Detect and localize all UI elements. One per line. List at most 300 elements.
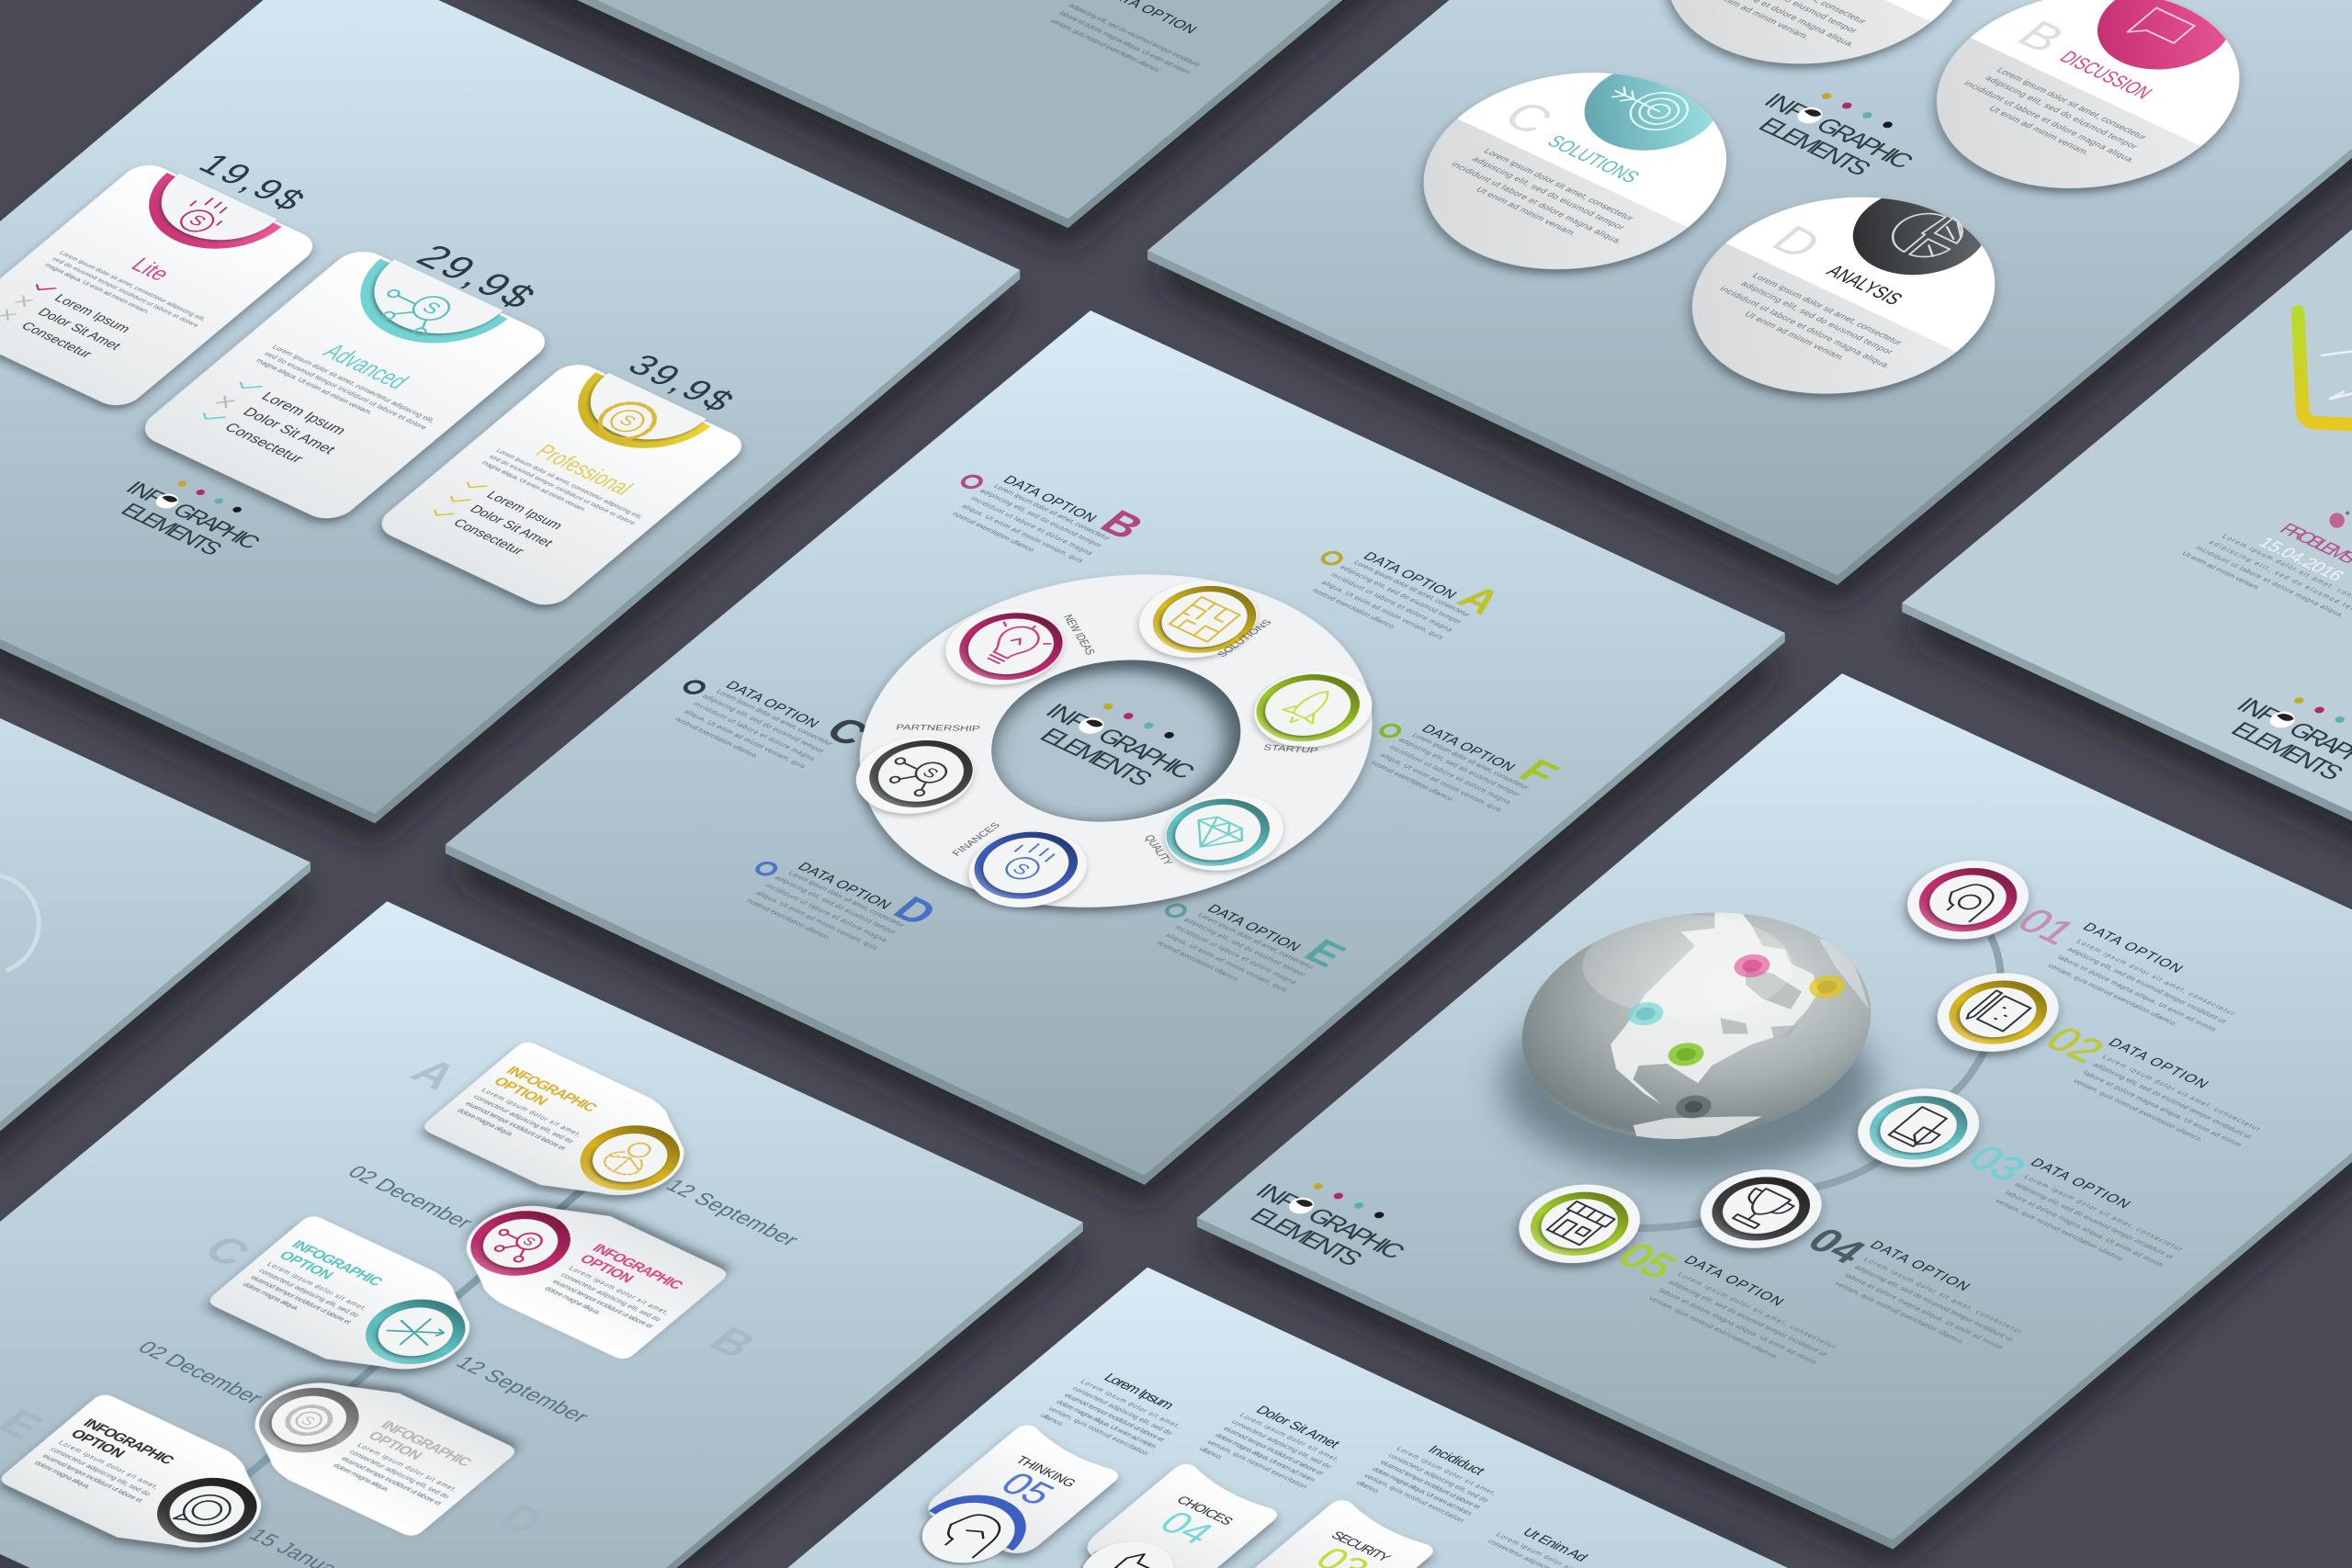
step 05 text xyxy=(1640,1254,1856,1374)
step 05 text: veniam, quis nostrud exercitation ullamco. xyxy=(1647,1295,1781,1360)
icon: rocket xyxy=(1276,684,1342,729)
icon: ring speech bubble xyxy=(171,1489,240,1534)
panel: small left edge sheet xyxy=(0,540,311,1411)
body text: Ut enim ad minim veniam. xyxy=(2180,550,2263,592)
tag card E: Lorem ipsum dolor sit amet, xyxy=(57,1439,161,1490)
step 02 number: 02 xyxy=(2036,1020,2114,1070)
panel: discs sheet xyxy=(1148,0,2352,585)
pricing card: Professional: magna aliqua. Ut enim ad minim veniam. xyxy=(480,460,588,513)
column: Lorem Ipsum: ullamco. xyxy=(1038,1412,1067,1427)
tag card B xyxy=(426,1179,731,1361)
column: Incididuct: Incididuct xyxy=(1424,1443,1488,1478)
data option B: Lorem ipsum dolor sit amet, consectetur xyxy=(992,482,1113,542)
data option F: aliqua. Ut enim ad minim veniam, quis xyxy=(1378,751,1504,813)
tag card A: INFOGRAPHIC xyxy=(503,1065,601,1115)
step 05 text: DATA OPTION xyxy=(1680,1254,1787,1308)
panel: bottom columns sheet xyxy=(787,1268,1788,1568)
background letter A: A xyxy=(401,1052,468,1097)
icon: gear coin xyxy=(589,397,666,446)
data option B: adipiscing elit, sed do eiusmod tempor xyxy=(978,487,1104,549)
price 29,9$: 29,9$ xyxy=(407,238,545,315)
data option E: DATA OPTION xyxy=(1204,902,1304,953)
panel: right edge sheet xyxy=(1902,68,2352,934)
ring item: finances: S xyxy=(1008,861,1035,878)
tag card E: dolore magna aliqua. xyxy=(32,1460,93,1490)
pricing card: Professional: S xyxy=(615,412,639,430)
icon: network coin xyxy=(483,1223,548,1263)
globe xyxy=(1451,869,1942,1183)
disc: D analysis xyxy=(1682,197,2001,404)
tag card C: OPTION xyxy=(276,1249,336,1282)
panel: timeline sheet xyxy=(0,901,1083,1568)
icon: network coin xyxy=(367,280,458,336)
pricing card: Professional: Lorem Ipsum xyxy=(483,490,565,532)
white ring xyxy=(755,510,1477,972)
step 04 text: veniam, quis nostrud exercitation ullamco. xyxy=(1833,1280,1967,1346)
background letter C: C xyxy=(193,1228,261,1274)
column: Ut Enim Ad xyxy=(1486,1518,1613,1568)
logo: right sheet: INF xyxy=(2231,694,2287,728)
map pin: green xyxy=(1661,1038,1711,1070)
panel: pricing sheet xyxy=(0,0,1020,823)
step 05 number: 05 xyxy=(1609,1235,1687,1286)
logo: discs sheet: GRAPHIC xyxy=(1810,113,1920,173)
pink dot xyxy=(2330,511,2349,528)
step 05 text: adipiscing elit, sed do eiusmod tempor incididunt ut xyxy=(1667,1279,1829,1358)
step 04 text xyxy=(1826,1238,2041,1359)
tag card D: dolore magna aliqua. xyxy=(332,1462,392,1493)
panel: central ring sheet xyxy=(446,310,1785,1185)
ring label: partnership: PARTNERSHIP xyxy=(895,723,981,733)
pricing card: Advanced: Consectetur xyxy=(220,421,307,466)
step 02 text: labore et dolore magna aliqua. Ut enim ad minim xyxy=(2081,1069,2244,1148)
panel: top centre sheet xyxy=(374,0,1713,228)
column: Incididuct: consectetur adipiscing elit, sed do xyxy=(1386,1452,1490,1504)
ring item: finances xyxy=(945,817,1111,922)
tag card A: eiusmod tempor incididunt ut labore et xyxy=(464,1100,569,1152)
logo: ring centre: GRAPHIC xyxy=(1091,724,1202,784)
ring label: new ideas: NEW IDEAS xyxy=(1060,614,1097,657)
background letter D: D xyxy=(487,1497,555,1542)
icon: speech bubble xyxy=(2128,8,2195,50)
data option B: DATA OPTION xyxy=(1000,473,1100,525)
disc: C solutions: incididunt ut labore et dolore magna aliqua. xyxy=(1449,161,1624,246)
cropped body fragment: veniam, quis nostrud exercitation ullamco. xyxy=(1048,17,1163,73)
disc: D analysis: ANALYSIS xyxy=(1822,261,1908,309)
tag card E: eiusmod tempor incididunt ut labore et xyxy=(40,1452,145,1504)
date: 02 December: 02 December xyxy=(343,1163,478,1233)
logo: pricing sheet xyxy=(102,467,279,569)
map pin: teal xyxy=(1621,998,1670,1030)
data option C: adipiscing elit, sed do eiusmod tempor xyxy=(701,693,827,754)
step 02 text: Lorem ipsum dolor sit amet, consectetur xyxy=(2100,1054,2263,1133)
step 04 number: 04 xyxy=(1797,1221,1876,1271)
data option E: E xyxy=(1295,932,1356,974)
tag card C: consectetur adipiscing elit, sed do xyxy=(257,1268,361,1319)
tag card B: INFOGRAPHIC xyxy=(589,1242,686,1292)
tag card A xyxy=(420,1040,724,1222)
white rule and pencil icon xyxy=(2321,351,2352,399)
tag card D: OPTION xyxy=(365,1429,425,1462)
column: Dolor Sit Amet: ullamco. xyxy=(1197,1445,1226,1461)
data option D: incididunt ut labore et dolore magna xyxy=(763,882,889,943)
step 05 text: labore et dolore magna aliqua. Ut enim ad minim xyxy=(1657,1287,1819,1366)
logo: right sheet xyxy=(2211,682,2352,795)
step 03 text: Lorem ipsum dolor sit amet, consectetur xyxy=(2022,1173,2185,1252)
date: 12 September: 12 September xyxy=(661,1176,804,1250)
icon: falling coin xyxy=(994,840,1059,883)
tag card D: Lorem ipsum dolor sit amet, xyxy=(356,1441,459,1493)
column: Incididuct: Lorem ipsum dolor sit amet, xyxy=(1395,1445,1498,1496)
data option D xyxy=(726,832,947,964)
column: Incididuct: ullamco. xyxy=(1354,1479,1383,1495)
icon: maze xyxy=(1170,597,1239,642)
column: Dolor Sit Amet xyxy=(1197,1401,1356,1497)
step 02 text xyxy=(2064,1036,2280,1156)
logo: discs sheet: INF xyxy=(1758,89,1814,123)
step 03 text: adipiscing elit, sed do eiusmod tempor incididunt ut xyxy=(2013,1181,2177,1260)
icon: coin and bag xyxy=(598,1137,662,1179)
disc: B discussion: Lorem ipsum dolor sit amet, consectetur xyxy=(1995,66,2149,142)
data option A: adipiscing elit, sed do eiusmod tempor xyxy=(1338,564,1464,626)
data option C: Lorem ipsum dolor sit amet, consectetur xyxy=(715,688,835,747)
column: Lorem Ipsum: Lorem ipsum dolor sit amet, xyxy=(1079,1378,1182,1429)
data option F: DATA OPTION xyxy=(1418,722,1519,773)
tag card E xyxy=(0,1392,301,1568)
data option D: DATA OPTION xyxy=(794,861,894,912)
timeline stem xyxy=(180,1185,588,1533)
tag card B: OPTION xyxy=(576,1253,637,1286)
disc: D analysis: Ut enim ad minim veniam. xyxy=(1742,310,1848,363)
pricing card: Advanced: Dolor Sit Amet xyxy=(239,405,339,457)
disc: C solutions: Ut enim ad minim veniam. xyxy=(1474,186,1579,238)
logo: globe sheet: INF xyxy=(1250,1179,1306,1213)
body text xyxy=(2180,527,2352,637)
data option F xyxy=(1350,694,1568,824)
column: Dolor Sit Amet: eiusmod tempor incididunt ut labore et xyxy=(1222,1425,1327,1477)
data option E: Lorem ipsum dolor sit amet, consectetur xyxy=(1196,911,1317,971)
tag card E: consectetur adipiscing elit, sed do xyxy=(49,1446,153,1497)
data option A: A xyxy=(1448,579,1511,621)
data option A: Lorem ipsum dolor sit amet, consectetur xyxy=(1352,559,1473,618)
disc: D analysis: incididunt ut labore et dolore magna aliqua. xyxy=(1717,285,1893,370)
disc: B discussion: incididunt ut labore et dolore magna aliqua. xyxy=(1962,79,2138,165)
disc: B discussion xyxy=(1927,0,2245,198)
map pin: pink xyxy=(1727,950,1777,982)
background letter B: B xyxy=(699,1320,766,1366)
pricing card: Advanced: magna aliqua. Ut enim ad minim veniam. xyxy=(254,357,375,416)
step 02 text: veniam, quis nostrud exercitation ullamco. xyxy=(2072,1077,2205,1143)
pricing card: Lite: Consectetur xyxy=(17,321,95,361)
logo: pricing sheet: INF xyxy=(120,478,171,508)
logo: globe sheet: ELEMENTS xyxy=(1244,1203,1369,1270)
ring item: partnership xyxy=(832,723,998,829)
pricing card: Lite: Lite xyxy=(126,254,176,285)
icon: network xyxy=(876,750,953,797)
ring item: partnership: S xyxy=(919,764,943,781)
logo: ring centre xyxy=(1019,687,1216,801)
column: Lorem Ipsum: Lorem Ipsum xyxy=(1101,1371,1177,1412)
tag card E: OPTION xyxy=(67,1427,128,1461)
pricing card: Professional: Consectetur xyxy=(449,517,526,558)
logo: discs sheet: ELEMENTS xyxy=(1752,113,1878,180)
column: Lorem Ipsum xyxy=(1038,1366,1198,1463)
step 01 text: labore et dolore magna aliqua. Ut enim ad minim xyxy=(2056,953,2218,1032)
column: Lorem Ipsum: dolore magna aliqua. Ut enim ad minim xyxy=(1055,1398,1159,1450)
logo: ring centre: ELEMENTS xyxy=(1034,724,1159,790)
card: choices: CHOICES xyxy=(1173,1495,1236,1528)
icon: pie chart xyxy=(1880,204,1975,265)
column: Lorem Ipsum: eiusmod tempor incididunt ut labore et xyxy=(1062,1392,1168,1443)
connecting arc xyxy=(1638,936,2001,1228)
disc: B discussion: DISCUSSION xyxy=(2055,47,2157,102)
card: choices xyxy=(1048,1461,1286,1568)
step 01 text: Lorem ipsum dolor sit amet, consectetur xyxy=(2075,938,2237,1017)
tag card C: dolore magna aliqua. xyxy=(241,1280,301,1312)
logo: globe sheet: GRAPHIC xyxy=(1301,1203,1411,1263)
pricing card: Lite: magna aliqua. Ut enim ad minim veniam. xyxy=(43,263,151,315)
tag card D: INFOGRAPHIC xyxy=(377,1419,475,1470)
disc: D analysis: adipiscing elit, sed do eiusmod tempor xyxy=(1738,279,1895,356)
tag card C: INFOGRAPHIC xyxy=(288,1238,386,1289)
data option E: incididunt ut labore et dolore magna xyxy=(1173,924,1299,986)
icon: phone and shield xyxy=(1889,1107,1955,1150)
disc: C solutions: Lorem ipsum dolor sit amet, consectetur xyxy=(1481,147,1636,223)
pricing card: Advanced: sed do eiusmod tempor incididunt ut labore et dolore xyxy=(263,350,429,431)
data option F: F xyxy=(1510,752,1568,793)
icon: storefront xyxy=(1544,1201,1614,1247)
tag card B: consectetur adipiscing elit, sed do xyxy=(559,1271,663,1323)
step 01 text xyxy=(2040,920,2255,1041)
ring item: new ideas xyxy=(922,593,1088,699)
data option A: aliqua. Ut enim ad minim veniam, quis xyxy=(1319,579,1445,640)
cropped body fragment: adipiscing elit, sed do eiusmod tempor incididunt xyxy=(1067,2,1203,68)
icon: gear coin xyxy=(279,1401,339,1439)
tag card A: OPTION xyxy=(490,1075,551,1108)
pricing card: Lite xyxy=(0,157,325,412)
logo: pricing sheet: GRAPHIC xyxy=(166,500,266,553)
pricing card: Lite: Dolor Sit Amet xyxy=(34,306,123,353)
card: thinking: THINKING xyxy=(1012,1454,1079,1490)
data option C: DATA OPTION xyxy=(722,679,822,730)
tag card D: S xyxy=(297,1414,319,1428)
yellow-green frame xyxy=(2298,312,2352,424)
cropped body fragment: labore et dolore magna aliqua. Ut enim ad minim xyxy=(1057,9,1193,75)
tag card A: Lorem ipsum dolor sit amet, xyxy=(480,1087,583,1138)
column: Incididuct xyxy=(1354,1433,1513,1530)
step 02 text: DATA OPTION xyxy=(2105,1036,2211,1091)
step 03 text xyxy=(1986,1156,2202,1277)
data option F: nostrud exercitation ullamco. xyxy=(1369,760,1457,803)
data option B: aliqua. Ut enim ad minim veniam, quis xyxy=(960,502,1086,564)
step 01 badge xyxy=(1883,845,2053,954)
disc: B discussion: B xyxy=(2006,13,2075,61)
tag card D: consectetur adipiscing elit, sed do xyxy=(347,1449,451,1500)
pricing card: Professional: Dolor Sit Amet xyxy=(467,503,556,549)
tag card C xyxy=(205,1213,510,1395)
pricing card: Lite: S xyxy=(184,212,209,230)
pricing card: Lite: sed do eiusmod tempor incididunt ut labore et dolore xyxy=(51,256,199,329)
step 03 number: 03 xyxy=(1958,1138,2036,1189)
step 05 text: Lorem ipsum dolor sit amet, consectetur xyxy=(1676,1271,1838,1350)
icon: pointing hand xyxy=(1115,1551,1160,1568)
logo: discs sheet xyxy=(1737,77,1934,190)
icon: falling coin xyxy=(171,195,236,237)
logo: ring centre: INF xyxy=(1040,699,1095,733)
data option B: incididunt ut labore et dolore magna xyxy=(969,495,1095,557)
data option D: nostrud exercitation ullamco. xyxy=(745,897,832,941)
icon: trophy xyxy=(1724,1185,1797,1232)
ring label: solutions: SOLUTIONS xyxy=(1216,618,1274,659)
data option A: nostrud exercitation ullamco. xyxy=(1310,587,1398,630)
column: Lorem Ipsum: consectetur adipiscing elit, sed do xyxy=(1070,1385,1174,1437)
step 01 text: adipiscing elit, sed do eiusmod tempor incididunt ut xyxy=(2065,946,2229,1025)
data option E: nostrud exercitation ullamco. xyxy=(1155,939,1242,983)
step 02 badge xyxy=(1913,958,2084,1066)
ring label: startup: STARTUP xyxy=(1262,743,1319,755)
disc: C solutions: adipiscing elit, sed do eiusmod tempor xyxy=(1469,155,1627,232)
ring item: startup xyxy=(1230,656,1396,761)
disc: B discussion: adipiscing elit, sed do eiusmod tempor xyxy=(1983,74,2140,152)
panel: globe sheet xyxy=(1197,673,2352,1550)
tag card A: dolore magna aliqua. xyxy=(456,1107,516,1138)
date: 12 September second: 12 September xyxy=(450,1353,594,1427)
step 04 text: Lorem ipsum dolor sit amet, consectetur xyxy=(1861,1256,2025,1335)
data option D: aliqua. Ut enim ad minim veniam, quis xyxy=(754,889,880,951)
data option C: aliqua. Ut enim ad minim veniam, quis xyxy=(683,708,808,770)
column: Lorem Ipsum: veniam, quis nostrud exercitation xyxy=(1046,1405,1150,1457)
step 04 text: adipiscing elit, sed do eiusmod tempor incididunt ut xyxy=(1852,1264,2016,1343)
pricing card: Advanced: S xyxy=(417,299,446,318)
icon: head with idea xyxy=(933,1508,1010,1558)
icon: bulb xyxy=(971,615,1058,671)
tag card C: eiusmod tempor incididunt ut labore et xyxy=(249,1274,354,1325)
tag card A: consectetur adipiscing elit, sed do xyxy=(471,1093,576,1145)
tag card B: dolore magna aliqua. xyxy=(543,1285,604,1315)
column: Dolor Sit Amet: Lorem ipsum dolor sit amet, xyxy=(1238,1412,1341,1463)
logo: right sheet: ELEMENTS xyxy=(2225,717,2350,784)
data option C xyxy=(654,651,879,784)
data option A xyxy=(1292,522,1511,652)
data option C: incididunt ut labore et dolore magna xyxy=(692,700,818,762)
ring label: finances: FINANCES xyxy=(950,821,1003,858)
tag card D xyxy=(215,1357,519,1539)
data option C: nostrud exercitation ullamco. xyxy=(673,716,761,760)
data option B: B xyxy=(1091,503,1154,547)
data option F: Lorem ipsum dolor sit amet, consectetur xyxy=(1410,731,1532,791)
logo: globe sheet xyxy=(1229,1168,1426,1280)
card: security xyxy=(1234,1497,1442,1568)
data option D: adipiscing elit, sed do eiusmod tempor xyxy=(773,874,899,936)
pricing card: Professional: Lorem ipsum dolor sit amet, consectetur adipiscing elit, xyxy=(494,448,644,520)
card: security: SECURITY xyxy=(1328,1529,1394,1564)
column: Ut Enim Ad: Ut Enim Ad xyxy=(1519,1526,1590,1564)
column: Dolor Sit Amet: veniam, quis nostrud exercitation xyxy=(1205,1438,1309,1490)
globe highlight xyxy=(1582,915,1792,1017)
body text: incididunt ut labore et dolore magna aliqua. xyxy=(2194,545,2346,619)
step 04 text: DATA OPTION xyxy=(1866,1238,1973,1293)
disc: B discussion: Ut enim ad minim veniam. xyxy=(1986,105,2092,157)
pricing card: Advanced: Lorem Ipsum xyxy=(258,389,350,437)
step 04 text: labore et dolore magna aliqua. Ut enim ad minim xyxy=(1843,1272,2006,1350)
card: thinking xyxy=(889,1422,1127,1568)
step 03 text: DATA OPTION xyxy=(2027,1156,2133,1211)
data option C: C xyxy=(816,710,879,753)
logo: pricing sheet: ELEMENTS xyxy=(115,500,228,559)
data option A: DATA OPTION xyxy=(1360,550,1460,602)
date: 02 December second: 02 December xyxy=(132,1338,267,1408)
pricing card: Professional: sed do eiusmod tempor incididunt ut labore et dolore xyxy=(487,454,637,526)
column: Dolor Sit Amet: consectetur adipiscing elit, sed do xyxy=(1229,1418,1334,1470)
pricing card: Lite: Lorem ipsum dolor sit amet, consectetur adipiscing elit, xyxy=(58,251,207,322)
icon: head xyxy=(1936,879,2002,921)
step 01 text: DATA OPTION xyxy=(2079,920,2187,976)
column: Incididuct: eiusmod tempor incididunt ut labore et xyxy=(1378,1459,1483,1510)
data option E: adipiscing elit, sed do eiusmod tempor xyxy=(1182,916,1308,978)
step 03 text: veniam, quis nostrud exercitation ullamco. xyxy=(1994,1198,2128,1263)
card: thinking: 05 xyxy=(991,1465,1064,1512)
disc: C solutions xyxy=(1414,73,1733,279)
column: Dolor Sit Amet: Dolor Sit Amet xyxy=(1252,1404,1343,1451)
globe land masses xyxy=(1611,911,1870,1143)
disc: C solutions: C xyxy=(1492,94,1564,142)
tag card B: eiusmod tempor incididunt ut labore et xyxy=(551,1279,656,1330)
disc: D analysis: Lorem ipsum dolor sit amet, consectetur xyxy=(1749,272,1905,347)
column: Incididuct: dolore magna aliqua. Ut enim ad minim xyxy=(1371,1466,1475,1517)
disc: C solutions: SOLUTIONS xyxy=(1543,131,1645,186)
icon: target xyxy=(1597,75,1699,137)
data option D: D xyxy=(884,889,947,932)
globe shadow xyxy=(1500,990,1875,1176)
step 05 badge xyxy=(1494,1169,1665,1279)
step 01 number: 01 xyxy=(2007,901,2086,952)
icon: chart arrow xyxy=(381,1310,449,1353)
map pin: dark xyxy=(1668,1090,1719,1122)
step 03 badge xyxy=(1833,1074,2004,1182)
ring item: quality xyxy=(1142,780,1307,886)
map pin: yellow xyxy=(1802,971,1852,1003)
icon: diamond xyxy=(1179,813,1251,857)
tag card C: Lorem ipsum dolor sit amet, xyxy=(266,1260,369,1312)
price 39,9$: 39,9$ xyxy=(619,349,742,418)
disc: D analysis: D xyxy=(1760,218,1833,267)
pricing card: Professional xyxy=(371,356,754,611)
data option E xyxy=(1136,874,1356,1005)
pricing card: Advanced: Advanced xyxy=(317,339,415,394)
data option D: Lorem ipsum dolor sit amet, consectetur xyxy=(786,870,908,929)
step 02 text: adipiscing elit, sed do eiusmod tempor incididunt ut xyxy=(2091,1061,2255,1140)
data option F: incididunt ut labore et dolore magna xyxy=(1387,744,1514,806)
price 19,9$: 19,9$ xyxy=(190,148,313,217)
step 04 badge xyxy=(1676,1155,1847,1263)
tag card B: S xyxy=(519,1235,538,1248)
pricing card: Advanced: Lorem ipsum dolor sit amet, consectetur adipiscing elit, xyxy=(270,344,437,424)
data option B xyxy=(932,446,1154,577)
date: 15.04.2016 xyxy=(2254,535,2348,584)
data option E: aliqua. Ut enim ad minim veniam, quis xyxy=(1164,931,1290,993)
step 01 text: veniam, quis nostrud exercitation ullamco. xyxy=(2046,962,2180,1028)
ring label: quality: QUALITY xyxy=(1142,833,1175,867)
card: choices: 04 xyxy=(1150,1505,1223,1551)
pricing card: Professional: Professional xyxy=(530,440,639,499)
icon: map and pencil xyxy=(1964,990,2031,1034)
pricing card: Lite: Lorem Ipsum xyxy=(51,292,133,335)
tag card E: INFOGRAPHIC xyxy=(80,1416,177,1467)
pricing card: Advanced xyxy=(133,243,559,525)
tag card B: Lorem ipsum dolor sit amet, xyxy=(567,1265,671,1316)
data option F: adipiscing elit, sed do eiusmod tempor xyxy=(1396,736,1522,798)
ring hole xyxy=(913,622,1305,872)
